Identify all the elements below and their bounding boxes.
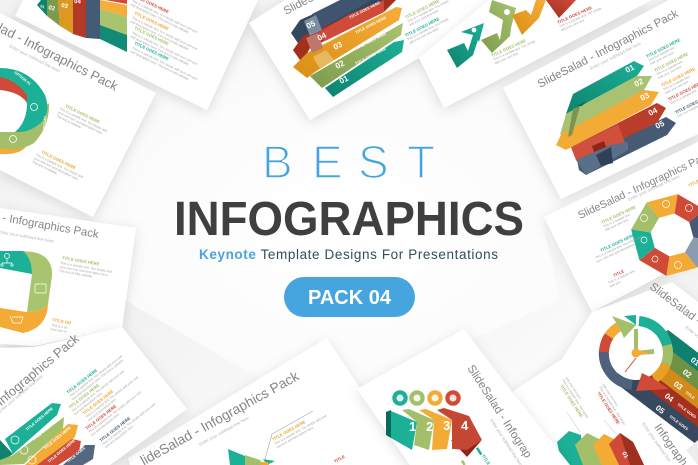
text block red: TITLE GOES HERE (85, 404, 117, 431)
bars text block green: TITLE GOES HERE (559, 384, 584, 418)
bars text block red: TITLE GOES HERE (596, 391, 621, 425)
text block red: This is a sample text. (607, 269, 636, 285)
panel: zigzag arrows slide (419, 0, 652, 108)
text block orange: This is a sample text. You simply add your own (85, 375, 139, 419)
text block green: add your own text here. (408, 8, 440, 27)
clock band labels: 03 (672, 379, 685, 392)
slide subhead: Enter your subhead line here (198, 415, 250, 447)
numbered arrows chart: 4 (461, 418, 469, 433)
text block orange: Add your own text. (664, 79, 690, 95)
heading: BEST: E (312, 136, 343, 188)
text block teal: text and description here. This text is editable. (71, 358, 125, 401)
text block orange: This is a sample text. (662, 74, 691, 91)
text block red: This is a sample text. You simply add your own (88, 390, 142, 434)
text block red: and description here. This text is fully editable. (130, 2, 190, 35)
text block green: This is a sample text. You simply (492, 39, 536, 62)
text block orange: TITLE GOES HERE (660, 66, 696, 88)
ribbon chart: 03 (332, 39, 344, 52)
text block green (55, 102, 110, 140)
text block green: TITLE GOES HERE (62, 255, 100, 267)
subtitle: Keynote Template Designs For Presentations (199, 247, 498, 262)
heading: INFOGRAPHICS: INFOGRAPHICS (174, 193, 524, 246)
clock band labels: TITLE (684, 391, 696, 400)
slide title: SlideSalad - Infographics Pack (536, 8, 681, 91)
text block red: This is a sample text. (669, 88, 698, 105)
text block red: TITLE (612, 268, 625, 278)
3d bars chart: 01 (620, 451, 629, 460)
bars leader lines (567, 412, 616, 434)
text block orange: This is a sample text. You simply add (35, 153, 84, 179)
text block teal: TITLE GOES HERE (599, 232, 636, 253)
text block green: This is a sample text. You simply add (60, 261, 112, 274)
text block red: This is a sample text. You simply (558, 6, 602, 29)
band chart (37, 0, 127, 52)
clock arrow heads (612, 315, 669, 391)
text block green: add your own text. (494, 51, 520, 65)
text block orange: This is a sa (51, 323, 68, 330)
house arrow chart: 03 (639, 90, 651, 103)
slide subhead: Enter your subhead line here (589, 41, 642, 71)
slide title: SlideSalad - Infograp (464, 363, 534, 460)
text block teal: your own text and description. (596, 242, 636, 264)
ribbon chart: 01 (338, 73, 350, 86)
text block green: your own text and description here. (59, 265, 109, 277)
house arrow chart: 05 (654, 118, 666, 131)
text block green: This text is editable. (55, 114, 83, 130)
arrow stack chart (0, 403, 95, 465)
bars text block red: This is a sample text. You simply (598, 385, 627, 426)
donut chart: OPTION 01 (13, 71, 31, 86)
clock band labels: TITLE GOES (676, 403, 697, 420)
text block teal: TITLE GOES HERE (66, 368, 98, 395)
text block green: TITLE GOES HERE (65, 103, 101, 125)
text block green: This text is fully editable. (59, 269, 94, 279)
text block green: TITLE GOES HERE (490, 38, 527, 58)
donut chart: OPTION 02 (41, 116, 47, 135)
text block orange (31, 148, 86, 186)
house arrow chart (556, 61, 676, 175)
heading: BEST: T (407, 136, 435, 188)
panel: top left bands slide (15, 0, 258, 110)
band chart: 01 (40, 4, 45, 9)
octagon ring (625, 188, 698, 282)
text block orange: This text is editable. (31, 160, 59, 176)
text block navy: This is a sample text. You simply add your own (102, 402, 156, 446)
bars text block red (594, 383, 630, 429)
text block orange: text and description here. (87, 397, 118, 422)
text block teal: add your own text here. (408, 26, 440, 45)
text block orange: TITLE GOES HERE (271, 419, 307, 442)
ribbon chart: 02 (334, 58, 346, 71)
text block green: Add your own text. (657, 64, 683, 80)
panel: numbered arrows slide (357, 329, 570, 465)
text block orange: TITLE GO (52, 317, 72, 325)
text block teal: TITLE GOES HERE (404, 16, 440, 38)
bars text block green: add your own text. (565, 376, 582, 400)
text block orange: your own text and description here. (33, 156, 80, 182)
panel: house arrows slide (503, 0, 698, 199)
ribbon chart: 05 (305, 18, 317, 31)
text block green: This is a sample text. You simply add your own (71, 369, 125, 413)
pack badge (284, 277, 415, 317)
3d bars chart (557, 431, 644, 465)
bars text block red: add your own text. (602, 383, 619, 407)
zigzag arrows (447, 0, 576, 68)
text block orange: and description here. This text is fully editable. (130, 19, 190, 52)
text block teal: This is a sample text. You simply (406, 17, 450, 41)
star chart (228, 449, 275, 465)
text block orange: own text and description here. (276, 425, 315, 449)
text block green: your own text and description here. (57, 110, 104, 136)
text block red: Add text. (609, 280, 622, 289)
numbered arrows chart: 1 (409, 419, 416, 434)
ribbon chart (291, 0, 404, 97)
clock bands (612, 330, 698, 451)
text block green: TITLE GOES HERE (68, 383, 100, 410)
text block teal (404, 12, 451, 45)
text block orange: This is a sample text. You simply add your (274, 413, 328, 446)
clock band labels: TITLE GOES (668, 415, 689, 432)
panel: donut slide (0, 0, 156, 217)
arrow stack chart: TITLE GOES (66, 446, 86, 464)
text block teal: This is a sample text. You simply add (594, 234, 643, 260)
text block red: TITLE GOES HERE (556, 5, 593, 25)
text block teal: TITLE GOES HERE (134, 40, 170, 62)
text block green: TITLE GOES HERE (653, 51, 689, 73)
clock band labels: 04 (663, 391, 676, 404)
band chart: 02 (47, 5, 56, 13)
text block green: This is a sample text. You simply add your own text (131, 31, 198, 66)
clock band labels: 02 (681, 367, 694, 380)
text block teal: This is a sample text. You simply add your own text (131, 46, 198, 81)
green marker (461, 460, 466, 465)
arrow stack chart: TITLE GOES HERE (32, 416, 61, 442)
text block orange: TITLE GOES HERE (82, 389, 114, 416)
numbered arrows chart: 2 (426, 419, 433, 434)
ribbon chart: 04 (316, 30, 328, 43)
numbered arrows chart (386, 408, 482, 457)
clock hands (625, 329, 654, 372)
panel: bullet arrows slide (0, 327, 187, 465)
panel: octagon slide (544, 142, 698, 312)
text block orange: TITLE GOES HERE (41, 149, 77, 171)
ribbon chart: TITLE GOES HERE (355, 32, 387, 51)
arrow stack chart: TITLE GOES HERE (47, 438, 76, 464)
arrow stack chart: TITLE GOES HERE (25, 406, 54, 432)
text block navy: TITLE GOES HERE (99, 416, 131, 443)
house arrow chart: 01 (624, 62, 636, 75)
text block teal: This is a sample text. (647, 45, 676, 62)
text block green (490, 34, 538, 65)
heading: BEST (262, 136, 435, 188)
text block orange (50, 317, 72, 334)
panel: star arrows slide (128, 338, 410, 465)
text block red: TITLE (333, 454, 346, 464)
text block green: This is a sample text. You simply add (59, 107, 108, 133)
leader line (265, 411, 313, 459)
panel: clock and bars slides (512, 281, 698, 465)
text block green (653, 51, 693, 80)
text block red: text and description here. (90, 412, 121, 437)
text block red (605, 264, 638, 289)
house arrow chart: 04 (647, 105, 659, 118)
text block green: This is a sample text. (655, 59, 684, 76)
icon circles (392, 390, 461, 406)
text block teal (592, 230, 645, 264)
text block navy: text and description here. (104, 424, 135, 449)
text block green (600, 204, 640, 232)
clock band labels: 05 (654, 403, 667, 416)
clock ring (604, 321, 668, 385)
text block green (59, 255, 113, 282)
donut chart (0, 68, 49, 154)
text block green: text and description here. (73, 391, 104, 416)
corner shadow (686, 440, 698, 465)
text block orange: This is a sample text. You simply add your own text (131, 16, 198, 51)
square ring chart (0, 251, 52, 333)
slide subhead: Enter your subhead line here (627, 173, 681, 202)
octagon icons (640, 200, 692, 268)
text block teal: and description here. This text is fully editable. (130, 49, 190, 82)
bars text block green (557, 376, 593, 422)
text block green: and description here. This text is fully editable. (130, 34, 190, 67)
text block red (556, 1, 604, 32)
ribbon chart: TITLE GOES HERE (355, 16, 387, 35)
text block orange: TITLE GOES HERE (134, 10, 170, 32)
text block teal: TITLE GOES HERE (645, 37, 681, 59)
bars text block green: This is a sample text. You simply (561, 378, 590, 419)
pack badge: PACK 04 (308, 287, 392, 309)
text block green: TITLE GOES HERE (134, 25, 170, 47)
clock band labels (654, 355, 698, 432)
background facets (122, 232, 590, 455)
heading: BEST: B (262, 136, 293, 188)
text block red: add your own text. (560, 18, 586, 32)
ribbon chart: TITLE GOES HERE (349, 1, 381, 20)
text block teal: This is a sample text. You simply add your own (69, 354, 123, 398)
bars slide subhead: Enter your subhead line (641, 422, 672, 463)
house arrow chart: 02 (633, 76, 645, 89)
numbered arrows chart: 3 (443, 418, 450, 433)
text block green: This is a sample text. (602, 212, 631, 229)
text block orange: your own te (50, 327, 67, 334)
slide subhead: Enter your subhead line here (9, 43, 62, 74)
text block teal: Add your own text. (649, 50, 675, 66)
heading: BEST: S (358, 136, 389, 188)
arrow stack chart: TITLE GOES HERE (43, 425, 72, 451)
panel: square ring slide (0, 202, 136, 346)
text block green: Add your own text. (604, 217, 630, 232)
text block teal (645, 37, 685, 66)
text block green: TITLE GOES HERE (600, 204, 637, 225)
ribbon chart: TITLE GOES HERE (355, 47, 387, 66)
band chart: 03 (61, 3, 69, 10)
panel: ribbons slide (249, 0, 505, 120)
text block teal (476, 447, 491, 465)
